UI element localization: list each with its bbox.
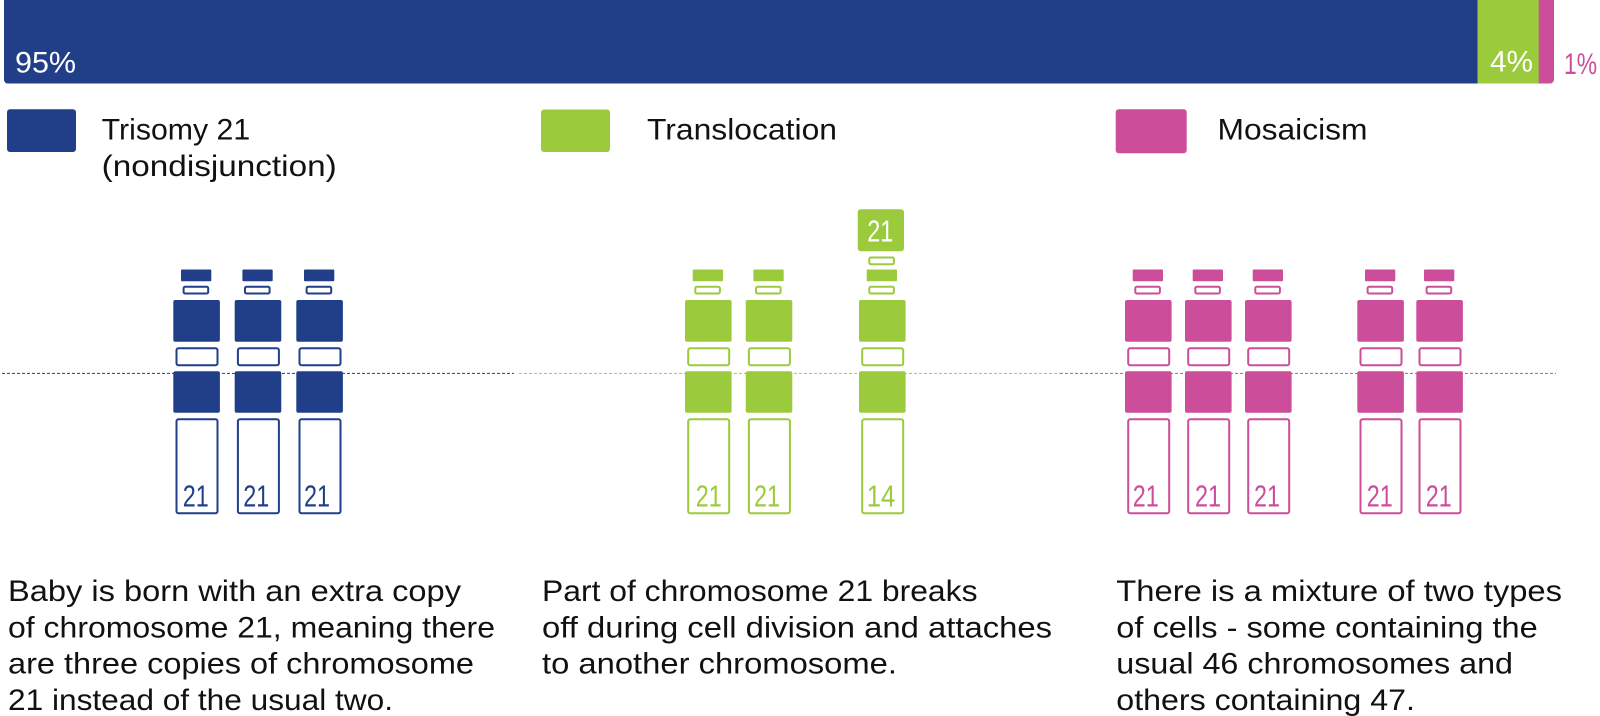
panel: translocation [519, 110, 1060, 680]
legend: mosaicism [1116, 109, 1368, 153]
panel: trisomy 21 [2, 109, 514, 716]
chromosome diagram: three copies of 21: 21 [183, 479, 209, 514]
description: translocation: off during cell division and attaches [542, 612, 1052, 645]
chromosome diagram: mixture of cell types: 21 [1367, 479, 1393, 514]
chromosome diagram: three copies of 21: 21 [243, 479, 269, 514]
stacked percentage bar [4, 0, 1597, 84]
description: trisomy 21: are three copies of chromosome [8, 648, 474, 680]
stacked percentage bar: 4% [1490, 46, 1533, 79]
chromosome diagram: mixture of cell types: 21 [1426, 479, 1452, 514]
chromosome diagram: 21 attached to 14: 21 [754, 479, 780, 514]
description: trisomy 21: Baby is born with an extra copy [8, 575, 461, 608]
legend: trisomy 21: (nondisjunction) [102, 150, 337, 183]
chromosome diagram: 21 attached to 14: 21 [696, 479, 722, 514]
description: mosaicism: There is a mixture of two types [1116, 575, 1562, 608]
description: translocation: Part of chromosome 21 breaks [542, 575, 978, 608]
legend: translocation: Translocation [647, 113, 837, 146]
chromosome diagram: 21 attached to 14 [519, 209, 1060, 514]
legend: mosaicism: Mosaicism [1218, 113, 1368, 146]
chromosome diagram: 21 attached to 14: 14 [867, 479, 895, 514]
description: trisomy 21 [8, 575, 495, 716]
legend: trisomy 21: Trisomy 21 [102, 113, 250, 146]
description: trisomy 21: of chromosome 21, meaning there [8, 612, 495, 645]
description: mosaicism: of cells - some containing the [1116, 612, 1538, 645]
panel: mosaicism [1060, 109, 1562, 716]
chromosome diagram: three copies of 21: 21 [304, 479, 330, 514]
chromosome diagram: mixture of cell types: 21 [1254, 479, 1280, 514]
description: mosaicism: usual 46 chromosomes and [1116, 648, 1513, 680]
legend: translocation [541, 110, 837, 152]
legend: trisomy 21 [7, 109, 337, 183]
chromosome diagram: mixture of cell types: 21 [1133, 479, 1159, 514]
description: translocation [542, 575, 1052, 680]
stacked percentage bar: 95% [15, 46, 76, 79]
chromosome diagram: three copies of 21 [2, 270, 514, 514]
chromosome diagram: mixture of cell types [1060, 270, 1556, 514]
description: translocation: to another chromosome. [542, 648, 897, 680]
chromosome diagram: mixture of cell types: 21 [1195, 479, 1221, 514]
description: mosaicism [1116, 575, 1562, 716]
chromosome diagram: 21 attached to 14: 21 [867, 213, 893, 248]
